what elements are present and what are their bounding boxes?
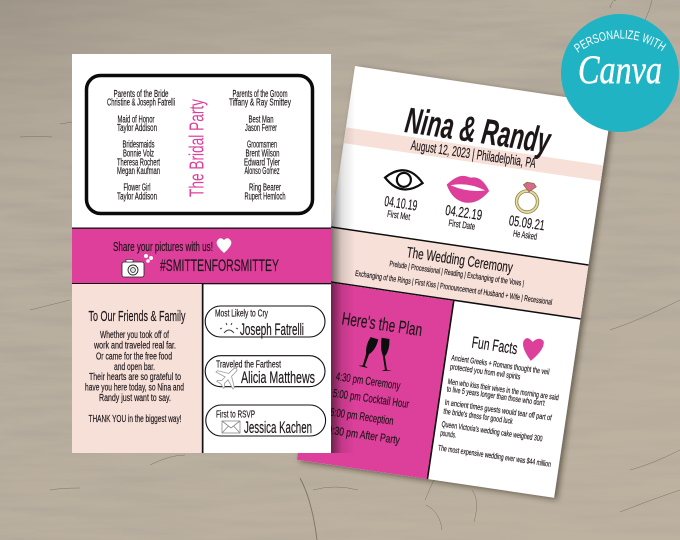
award: first to rsvp bbox=[206, 405, 326, 437]
ceremony order: Exchanging of the Rings | First Kiss | Pronouncement of Husband + Wife | Recessional bbox=[355, 269, 553, 307]
icon: camera bbox=[122, 254, 153, 277]
bride side list: Taylor Addison bbox=[117, 192, 157, 202]
award: first to rsvp: First to RSVP bbox=[216, 410, 255, 420]
ceremony order: Prelude | Processional | Reading | Exchanging of the Vows | bbox=[389, 259, 525, 288]
award: first to rsvp: Jessica Kachen bbox=[244, 418, 312, 437]
badge caption: PERSONALIZE WITH bbox=[574, 30, 666, 53]
right card: wedding program front bbox=[297, 66, 612, 498]
award: traveled the farthest: Alicia Matthews bbox=[241, 368, 315, 387]
message body: Randy just want to say. bbox=[99, 393, 171, 404]
first date bbox=[443, 203, 483, 233]
groom side list: Best Man bbox=[248, 114, 274, 126]
vertical heading: The Bridal Party bbox=[186, 99, 208, 197]
date and place: August 12, 2023 | Philadelphia, PA bbox=[410, 137, 537, 171]
hashtag: #SMITTENFORSMITTEY bbox=[160, 256, 279, 275]
message body: have you here today, so Nina and bbox=[85, 382, 184, 394]
fact list: In ancient times guests would tear off part of bbox=[444, 398, 553, 423]
share text: Share your pictures with us! bbox=[113, 240, 213, 254]
message body: Or came for the free food bbox=[96, 352, 172, 362]
groom side list bbox=[229, 89, 291, 202]
fact list: The most expensive wedding ever was $44 million bbox=[437, 443, 552, 469]
message body bbox=[85, 330, 184, 425]
panel: the bridal party bbox=[86, 76, 312, 214]
plan schedule: 4:30 pm Ceremony bbox=[335, 371, 401, 392]
fact list: Men who kiss their wives in the morning are said bbox=[447, 377, 559, 402]
fact list: pounds. bbox=[440, 428, 457, 440]
icon: ring bbox=[515, 181, 540, 214]
panel: to our friends and family bbox=[72, 284, 202, 453]
left card: wedding program back bbox=[72, 54, 331, 453]
plan schedule bbox=[327, 371, 413, 448]
icon: heart bbox=[521, 337, 544, 362]
award: most likely to cry bbox=[205, 306, 325, 339]
panel: awards bbox=[205, 306, 326, 437]
groom side list: Tiffany & Ray Smittey bbox=[229, 98, 291, 108]
plan schedule: 6:00 pm Reception bbox=[329, 407, 394, 428]
fact list: to live 5 years longer than those who don't bbox=[446, 384, 546, 408]
bride side list: Flower Girl bbox=[124, 182, 150, 194]
fact list bbox=[437, 353, 565, 469]
award: traveled the farthest bbox=[205, 356, 325, 393]
he asked date bbox=[506, 213, 546, 244]
award: most likely to cry: Most Likely to Cry bbox=[215, 308, 268, 320]
message body: work and traveled real far. bbox=[93, 340, 176, 352]
message body: THANK YOU in the biggest way! bbox=[88, 414, 182, 425]
panel: fun facts bbox=[437, 326, 569, 469]
fun facts heading: Fun Facts bbox=[471, 334, 519, 358]
message heading: To Our Friends & Family bbox=[88, 308, 186, 325]
panel: the wedding ceremony bbox=[323, 226, 589, 320]
plan schedule: 9:30 pm After Party bbox=[327, 424, 401, 447]
ceremony heading: The Wedding Ceremony bbox=[406, 244, 514, 277]
bride side list: Taylor Addison bbox=[117, 123, 157, 134]
message body: Their hearts are so grateful to bbox=[89, 372, 181, 383]
canva logo text: Canva bbox=[578, 47, 662, 92]
groom side list: Edward Tyler bbox=[244, 158, 280, 168]
bride side list: Maid of Honor bbox=[118, 114, 155, 126]
award: traveled the farthest: Traveled the Farthest bbox=[216, 360, 281, 370]
icon: lips bbox=[444, 174, 491, 206]
first date: First Date bbox=[448, 218, 476, 233]
first met date: 04.10.19 bbox=[383, 194, 418, 214]
bride side list: Megan Kaufman bbox=[117, 166, 160, 177]
bride side list: Parents of the Bride bbox=[114, 89, 169, 100]
he asked date: He Asked bbox=[512, 228, 538, 243]
bride side list: Theresa Rochert bbox=[117, 158, 160, 168]
bride side list: Bonnie Volz bbox=[123, 148, 154, 160]
message body: and open bar. bbox=[114, 362, 155, 373]
icon: eye bbox=[384, 168, 424, 192]
ceremony order bbox=[355, 254, 555, 307]
first date: 04.22.19 bbox=[444, 203, 483, 224]
fact list: the bride's dress for good luck bbox=[443, 407, 514, 426]
groom side list: Brent Wilson bbox=[246, 148, 280, 160]
groom side list: Rupert Hemloch bbox=[244, 192, 286, 202]
award: most likely to cry: Joseph Fatrelli bbox=[240, 320, 304, 339]
groom side list: Parents of the Groom bbox=[232, 89, 288, 100]
icon: airplane bbox=[212, 360, 245, 393]
plan schedule: 5:00 pm Cocktail Hour bbox=[332, 388, 410, 411]
plan heading: Here's the Plan bbox=[341, 308, 424, 340]
panel: share your pictures bbox=[72, 228, 331, 284]
badge: personalize with canva bbox=[561, 14, 679, 132]
groom side list: Jason Ferrer bbox=[245, 123, 277, 134]
title: couple names: Nina & Randy bbox=[403, 99, 554, 161]
bride side list: Bridesmaids bbox=[122, 140, 154, 150]
fact list: Queen Victoria's wedding cake weighed 300 bbox=[441, 420, 544, 443]
first met date: First Met bbox=[386, 209, 411, 223]
icon: crying face bbox=[220, 323, 238, 333]
groom side list: Ring Bearer bbox=[249, 182, 281, 194]
panel: here's the plan bbox=[297, 282, 454, 479]
he asked date: 05.09.21 bbox=[508, 213, 546, 234]
fact list: protected you from evil spirits bbox=[449, 362, 521, 381]
icon: envelope bbox=[222, 421, 240, 433]
icon: white heart bbox=[217, 238, 231, 253]
groom side list: Alonso Gomez bbox=[244, 166, 280, 177]
bride side list bbox=[107, 89, 175, 202]
bride side list: Christine & Joseph Fatrelli bbox=[107, 98, 175, 108]
message body: Whether you took off of bbox=[100, 330, 169, 341]
first met date bbox=[382, 194, 418, 224]
groom side list: Groomsmen bbox=[247, 140, 277, 150]
date band bbox=[344, 127, 603, 181]
fact list: Ancient Greeks + Romans thought the veil bbox=[451, 353, 550, 377]
icon: champagne glasses bbox=[358, 335, 396, 373]
